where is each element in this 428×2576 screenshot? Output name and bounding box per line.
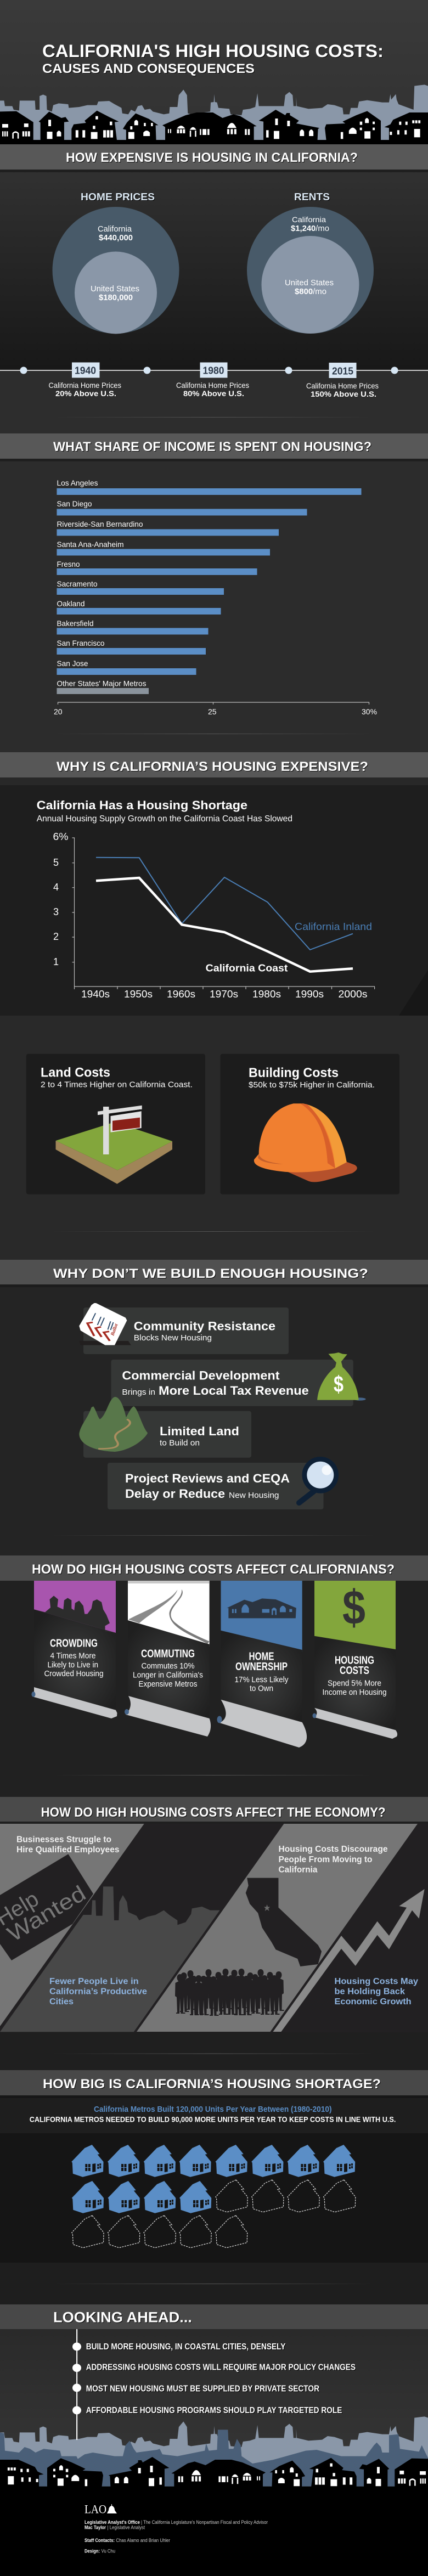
footer credits: | Legislative Analyst bbox=[108, 2524, 145, 2530]
panel: commercial development: Brings in bbox=[122, 1388, 155, 1397]
bar chart: share of income: San Diego bbox=[57, 499, 92, 508]
bar chart: share of income bbox=[54, 478, 377, 716]
heading: housing shortage chart: Annual Housing Supply Growth on the California Coast Has Slowed bbox=[37, 814, 292, 824]
ribbon: housing costs: HOUSING bbox=[335, 1654, 374, 1666]
panel: holding back growth bbox=[273, 1889, 425, 2032]
line chart: housing supply growth: 1990s bbox=[295, 989, 324, 1000]
section heading: why expensive bbox=[0, 752, 428, 777]
icon: dollar sign: $ bbox=[342, 1580, 365, 1634]
footer credits: Chas Alamo and Brian Uhler bbox=[116, 2538, 170, 2544]
panel: holding back growth: Economic Growth bbox=[335, 1997, 412, 2006]
ribbon: home ownership: OWNERSHIP bbox=[235, 1661, 288, 1673]
timeline 2015: 150% Above U.S. bbox=[311, 390, 376, 398]
panel: rents circles bbox=[247, 191, 374, 334]
footer skyline bbox=[0, 2416, 428, 2494]
ribbon: housing costs: COSTS bbox=[340, 1665, 369, 1677]
icon: magnifying glass bbox=[299, 1457, 339, 1503]
timeline 1980: California Home Prices bbox=[176, 381, 249, 390]
timeline 1980: 80% Above U.S. bbox=[183, 389, 244, 398]
panel: home prices circles bbox=[53, 191, 179, 334]
panel: rents circles: RENTS bbox=[294, 191, 330, 202]
timeline 1980 bbox=[176, 362, 249, 398]
section heading: how expensive: HOW EXPENSIVE IS HOUSING IN CALIFORNIA? bbox=[66, 150, 358, 165]
section heading: income share bbox=[0, 433, 428, 461]
panel: rents circles: United States bbox=[285, 278, 334, 288]
panel: discourage moving to California bbox=[137, 1824, 418, 2032]
ribbon: commuting: Longer in California's bbox=[133, 1671, 203, 1680]
panel: businesses struggle bbox=[0, 1824, 144, 2026]
line chart: housing supply growth: 1970s bbox=[210, 989, 238, 1000]
ribbon: crowding: Crowded Housing bbox=[44, 1669, 103, 1678]
pictogram: houses built and needed bbox=[71, 2145, 356, 2248]
panel: project reviews and CEQA: Delay or Reduce bbox=[125, 1487, 225, 1501]
panel: rents circles: California bbox=[292, 215, 326, 224]
panel: commercial development: More Local Tax Revenue bbox=[159, 1384, 309, 1397]
bar chart: share of income: 25 bbox=[208, 707, 217, 716]
item: build more housing: BUILD MORE HOUSING, IN COASTAL CITIES, DENSELY bbox=[86, 2342, 286, 2352]
title bbox=[42, 41, 384, 76]
ribbon: crowding: Likely to Live in bbox=[47, 1660, 98, 1670]
icon: crowd of people bbox=[175, 1969, 284, 2016]
section heading: how expensive bbox=[0, 144, 428, 172]
panel: land costs: 2 to 4 Times Higher on California Coast. bbox=[41, 1080, 193, 1090]
panel: fewer people in productive cities: California’s Productive bbox=[49, 1987, 147, 1997]
line chart: housing supply growth: 2 bbox=[53, 931, 59, 942]
ribbon: housing costs bbox=[313, 1580, 397, 1739]
text: shortage summary: California Metros Built 120,000 Units Per Year Between (1980-2010) bbox=[94, 2105, 331, 2114]
bar chart: share of income: Los Angeles bbox=[57, 478, 98, 487]
icon: road bbox=[128, 1589, 210, 1644]
footer credits: Design: bbox=[85, 2549, 100, 2555]
panel: limited land: to Build on bbox=[160, 1439, 200, 1448]
section heading: looking ahead: LOOKING AHEAD... bbox=[53, 2309, 192, 2326]
ribbon: home ownership: to Own bbox=[250, 1684, 273, 1693]
line chart: housing supply growth: 1 bbox=[53, 956, 59, 967]
panel: project reviews and CEQA: Project Reviews and CEQA bbox=[125, 1472, 290, 1485]
footer credits: | The California Legislature's Nonpartisan Fiscal and Policy Advisor bbox=[141, 2519, 268, 2526]
section heading: affect the economy: HOW DO HIGH HOUSING COSTS AFFECT THE ECONOMY? bbox=[41, 1805, 386, 1820]
bar chart: share of income: 20 bbox=[54, 707, 63, 716]
section heading: affect the economy bbox=[0, 1797, 428, 1822]
panel: home prices circles: United States bbox=[91, 284, 139, 294]
panel: discourage moving to California: California bbox=[279, 1865, 318, 1875]
ribbon: crowding bbox=[32, 1581, 117, 1718]
panel: fewer people in productive cities bbox=[0, 1886, 219, 2032]
footer credits: Staff Contacts: bbox=[85, 2538, 115, 2544]
icon: zigzag arrow bbox=[273, 1889, 425, 2032]
panel: rents circles: $1,240/mo bbox=[291, 224, 329, 233]
panel: commercial development bbox=[111, 1352, 366, 1406]
item: affordable programs: AFFORDABLE HOUSING PROGRAMS SHOULD PLAY TARGETED ROLE bbox=[86, 2406, 342, 2415]
scroll curl bbox=[32, 1687, 117, 1718]
text: shortage summary bbox=[30, 2105, 396, 2124]
bar chart: share of income: San Jose bbox=[57, 659, 88, 668]
timeline 2015: 2015 bbox=[332, 365, 353, 376]
panel: discourage moving to California: Housing Costs Discourage bbox=[279, 1845, 388, 1854]
timeline 1940: 1940 bbox=[75, 365, 96, 376]
panel: home prices circles: California bbox=[98, 224, 132, 234]
icon: money bag: $ bbox=[334, 1371, 343, 1397]
ribbon: home ownership: HOME bbox=[249, 1651, 274, 1663]
icon: hard hat bbox=[254, 1103, 357, 1182]
text: shortage summary: CALIFORNIA METROS NEEDED TO BUILD 90,000 MORE UNITS PER YEAR TO KEEP COSTS IN LINE WITH U.S. bbox=[30, 2115, 396, 2124]
bar chart: share of income: Sacramento bbox=[57, 579, 98, 588]
item: private sector: MOST NEW HOUSING MUST BE SUPPLIED BY PRIVATE SECTOR bbox=[86, 2385, 319, 2394]
section heading: income share: WHAT SHARE OF INCOME IS SPENT ON HOUSING? bbox=[53, 439, 371, 454]
panel: limited land: Limited Land bbox=[160, 1424, 239, 1438]
panel: land costs: Land Costs bbox=[41, 1066, 110, 1080]
panel: project reviews and CEQA: New Housing bbox=[229, 1491, 279, 1500]
panel: land costs bbox=[26, 1054, 205, 1194]
footer credits bbox=[85, 2502, 268, 2555]
footer credits: Legislative Analyst's Office bbox=[85, 2519, 140, 2526]
line chart: housing supply growth: 2000s bbox=[338, 989, 368, 1000]
title: CAUSES AND CONSEQUENCES bbox=[42, 61, 255, 76]
panel: building costs: Building Costs bbox=[249, 1066, 339, 1080]
panel: businesses struggle: Hire Qualified Employees bbox=[16, 1845, 120, 1855]
bar chart: share of income: Oakland bbox=[57, 599, 85, 608]
line chart: housing supply growth: 1950s bbox=[124, 989, 153, 1000]
panel: limited land bbox=[79, 1397, 251, 1458]
heading: housing shortage chart bbox=[37, 798, 292, 824]
section heading: affect Californians: HOW DO HIGH HOUSING COSTS AFFECT CALIFORNIANS? bbox=[32, 1562, 395, 1577]
section heading: how big is the shortage bbox=[0, 2070, 428, 2098]
sign: help wanted bbox=[0, 1854, 93, 1960]
line chart: housing supply growth: California Inland bbox=[295, 921, 372, 932]
timeline 1980: 1980 bbox=[203, 365, 224, 376]
icon: hills bbox=[79, 1397, 148, 1452]
ribbon: home ownership bbox=[217, 1581, 307, 1748]
panel: community resistance bbox=[79, 1303, 289, 1354]
bar chart: share of income: 30% bbox=[362, 707, 377, 716]
heading: housing shortage chart: California Has a Housing Shortage bbox=[37, 798, 247, 812]
panel: holding back growth: be Holding Back bbox=[335, 1987, 405, 1997]
scroll curl bbox=[217, 1700, 307, 1748]
panel: community resistance: Blocks New Housing bbox=[134, 1333, 212, 1343]
panel: building costs: $50k to $75k Higher in California. bbox=[249, 1080, 375, 1090]
bar chart: share of income: Bakersfield bbox=[57, 619, 93, 628]
ribbon: commuting: COMMUTING bbox=[141, 1648, 195, 1660]
timeline 1940: California Home Prices bbox=[48, 381, 121, 390]
line chart: housing supply growth: California Coast bbox=[206, 963, 288, 974]
line chart: housing supply growth: 3 bbox=[53, 906, 59, 917]
timeline 1940 bbox=[48, 362, 121, 398]
ribbon: crowding: CROWDING bbox=[50, 1638, 98, 1650]
line chart: housing supply growth: 1980s bbox=[252, 989, 281, 1000]
footer credits: Mac Taylor bbox=[85, 2524, 106, 2530]
panel: building costs bbox=[221, 1054, 399, 1194]
bar chart: share of income: Other States' Major Metros bbox=[57, 679, 146, 688]
panel: home prices circles: $440,000 bbox=[99, 234, 133, 243]
ribbon: commuting: Expensive Metros bbox=[138, 1679, 198, 1689]
bar chart: share of income: San Francisco bbox=[57, 639, 105, 647]
timeline 1940: 20% Above U.S. bbox=[55, 389, 116, 398]
timeline 2015: California Home Prices bbox=[306, 381, 379, 390]
panel: economy effects bbox=[0, 1824, 428, 2032]
icon: money bag bbox=[317, 1352, 366, 1401]
panel: fewer people in productive cities: Fewer People Live in bbox=[49, 1977, 139, 1986]
timeline 2015 bbox=[306, 363, 379, 398]
ribbon: housing costs: Income on Housing bbox=[323, 1688, 386, 1697]
section heading: affect Californians bbox=[0, 1555, 428, 1581]
item: policy changes: ADDRESSING HOUSING COSTS WILL REQUIRE MAJOR POLICY CHANGES bbox=[86, 2363, 356, 2372]
line chart: housing supply growth: 5 bbox=[53, 857, 59, 868]
icon: land for sale bbox=[56, 1106, 172, 1184]
panel: fewer people in productive cities: Cities bbox=[49, 1997, 74, 2006]
section heading: how big is the shortage: HOW BIG IS CALIFORNIA’S HOUSING SHORTAGE? bbox=[43, 2077, 381, 2092]
section heading: why don't we build: WHY DON’T WE BUILD ENOUGH HOUSING? bbox=[53, 1266, 368, 1281]
ribbon: crowding: 4 Times More bbox=[50, 1651, 95, 1661]
houses needed bbox=[72, 2180, 356, 2248]
icon: ballot bbox=[79, 1303, 131, 1345]
ribbon: commuting: Commutes 10% bbox=[142, 1661, 194, 1671]
icon: house bbox=[227, 1598, 296, 1618]
line chart: housing supply growth: 1960s bbox=[167, 989, 195, 1000]
line chart: housing supply growth bbox=[53, 831, 375, 1000]
line chart: housing supply growth: 6% bbox=[53, 831, 68, 842]
bar chart: share of income: Santa Ana-Anaheim bbox=[57, 540, 124, 549]
bar chart: share of income: Fresno bbox=[57, 560, 80, 568]
sign: help wanted: Wanted bbox=[3, 1881, 90, 1947]
line chart: housing supply growth: 1940s bbox=[81, 989, 110, 1000]
section heading: why expensive: WHY IS CALIFORNIA’S HOUSING EXPENSIVE? bbox=[57, 759, 368, 774]
panel: project reviews and CEQA bbox=[108, 1457, 339, 1509]
panel: community resistance: Community Resistance bbox=[134, 1319, 275, 1333]
timeline bbox=[0, 362, 428, 398]
panel: rents circles: $800/mo bbox=[295, 287, 326, 296]
header skyline bbox=[0, 84, 428, 146]
line chart: housing supply growth: 4 bbox=[53, 882, 59, 893]
footer credits: Vu Chu bbox=[102, 2549, 115, 2555]
panel: commercial development: Commercial Development bbox=[122, 1368, 280, 1382]
title: CALIFORNIA'S HIGH HOUSING COSTS: bbox=[42, 41, 384, 61]
panel: home prices circles: HOME PRICES bbox=[81, 191, 155, 202]
scroll curl bbox=[313, 1708, 397, 1739]
panel: businesses struggle: Businesses Struggle to bbox=[16, 1835, 111, 1845]
scroll curl bbox=[125, 1696, 211, 1737]
panel: discourage moving to California: People From Moving to bbox=[279, 1855, 373, 1864]
icon: people silhouette bbox=[34, 1596, 116, 1633]
looking ahead timeline bbox=[72, 2329, 356, 2440]
ribbon: housing costs: Spend 5% More bbox=[328, 1679, 381, 1688]
bar chart: share of income: Riverside-San Bernardino bbox=[57, 520, 143, 528]
section heading: why don't we build bbox=[0, 1260, 428, 1287]
icon: California map bbox=[246, 1878, 322, 1966]
ribbon: commuting bbox=[125, 1581, 211, 1737]
panel: home prices circles: $180,000 bbox=[99, 294, 133, 302]
section heading: looking ahead bbox=[0, 2304, 428, 2329]
panel: community resistance: Ballot bbox=[109, 1323, 119, 1337]
panel: holding back growth: Housing Costs May bbox=[335, 1977, 418, 1986]
ribbon: home ownership: 17% Less Likely bbox=[235, 1675, 289, 1684]
logo: LAO: LAO bbox=[85, 2502, 106, 2516]
houses built bbox=[71, 2145, 355, 2213]
